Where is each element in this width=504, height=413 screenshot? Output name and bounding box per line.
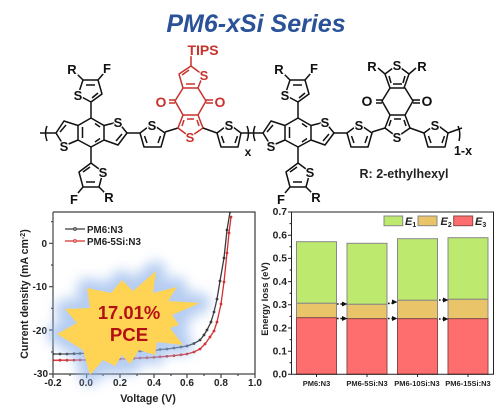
legend: 2 xyxy=(448,222,452,229)
curve: PM6-5Si:N3 xyxy=(53,217,231,360)
BDD acceptor unit: R xyxy=(417,59,427,74)
benzodithiophene unit 1: F xyxy=(70,192,78,207)
red TIPS-substituted unit: O xyxy=(156,94,167,110)
PCE starburst callout: PCE xyxy=(110,324,148,345)
legend xyxy=(384,216,486,229)
y tick labels: 0.3 xyxy=(273,300,287,311)
BDD acceptor unit: O xyxy=(362,93,373,109)
BDD acceptor unit: S xyxy=(393,58,402,73)
x tick labels: 0.6 xyxy=(180,378,194,389)
axes ticks xyxy=(49,212,255,378)
y tick labels: -20 xyxy=(33,326,47,337)
thiophene bridge 1 xyxy=(127,118,178,147)
y axis title: ) xyxy=(19,229,31,233)
benzodithiophene unit 2: F xyxy=(310,61,318,76)
thiophene bridge 4 and right bracket xyxy=(410,118,472,158)
legend: PM6:N3 xyxy=(87,225,123,236)
thiophene bridge 1: S xyxy=(148,118,157,133)
x tick labels xyxy=(44,378,262,389)
PCE starburst callout: 17.01% xyxy=(98,302,160,323)
R definition label: R: 2-ethylhexyl xyxy=(360,167,448,181)
y tick labels: -10 xyxy=(33,282,47,293)
benzodithiophene unit 1: R xyxy=(104,190,114,205)
benzodithiophene unit 1: R xyxy=(67,62,77,77)
y tick labels xyxy=(273,207,287,381)
benzodithiophene unit 2: S xyxy=(267,139,276,154)
thiophene bridge 2 xyxy=(203,118,263,147)
x tick labels: 1.0 xyxy=(248,378,262,389)
bars: PM6-15Si:N3 xyxy=(448,238,488,374)
title: PM6-xSi Series xyxy=(166,10,346,38)
BDD acceptor unit: R xyxy=(367,59,377,74)
legend: 3 xyxy=(482,222,486,229)
BDD acceptor unit: O xyxy=(422,93,433,109)
bars: PM6-10Si:N3 xyxy=(398,239,438,374)
benzodithiophene unit 2: R xyxy=(311,190,321,205)
benzodithiophene unit 2 xyxy=(263,61,334,207)
benzodithiophene unit 1: F xyxy=(103,61,111,76)
y axis title: Current density (mA cm xyxy=(19,239,31,359)
benzodithiophene unit 1: S xyxy=(60,139,69,154)
y tick labels: 0.6 xyxy=(273,230,287,242)
bars: PM6-5Si:N3 xyxy=(347,243,387,374)
y tick labels: 0.0 xyxy=(273,370,287,381)
thiophene bridge 4 and right bracket: 1-x xyxy=(454,144,472,158)
legend xyxy=(65,225,141,248)
legend: E xyxy=(440,216,448,228)
x tick labels: 0.8 xyxy=(214,378,228,389)
y axis title: Energy loss (eV) xyxy=(259,262,270,336)
benzodithiophene unit 2: S xyxy=(306,165,315,180)
legend: E xyxy=(475,216,482,228)
bars: PM6:N3 xyxy=(296,242,336,374)
BDD acceptor unit: S xyxy=(393,130,402,145)
x tick labels: 0.2 xyxy=(113,378,127,389)
benzodithiophene unit 1: S xyxy=(99,165,108,180)
x axis title: Voltage (V) xyxy=(120,393,176,405)
legend: PM6-5Si:N3 xyxy=(87,237,141,248)
y tick labels: 0.5 xyxy=(273,254,287,265)
thiophene bridge 4 and right bracket: S xyxy=(431,118,440,133)
x tick labels: PM6-15Si:N3 xyxy=(445,379,491,388)
J-V chart xyxy=(19,212,262,405)
axes frame xyxy=(53,212,255,374)
x tick labels xyxy=(303,379,491,388)
benzodithiophene unit 2: S xyxy=(281,88,290,103)
axes frame and ticks xyxy=(288,212,494,377)
x tick labels: PM6:N3 xyxy=(303,379,330,388)
y tick labels: 0.7 xyxy=(273,207,287,218)
PCE starburst callout xyxy=(57,271,200,375)
x tick labels: -0.2 xyxy=(44,378,62,389)
red TIPS-substituted unit: O xyxy=(215,94,226,110)
x tick labels: 0.0 xyxy=(79,378,93,389)
red TIPS-substituted unit: S xyxy=(186,130,195,145)
benzodithiophene unit 2: F xyxy=(277,192,285,207)
left polymer bracket and x subscript: x xyxy=(245,145,252,159)
x tick labels: PM6-5Si:N3 xyxy=(346,379,388,388)
benzodithiophene unit 1: S xyxy=(74,88,83,103)
red TIPS-substituted unit xyxy=(156,42,226,145)
legend: E xyxy=(405,216,412,228)
benzodithiophene unit 1: S xyxy=(114,115,123,130)
left polymer bracket and x subscript xyxy=(40,126,252,159)
dotted arrows between bars xyxy=(337,298,448,322)
thiophene bridge 2: S xyxy=(225,118,234,133)
legend: 1 xyxy=(412,222,416,229)
y tick labels: 0.1 xyxy=(273,346,287,358)
chemical structure: PM6-xSi polymer xyxy=(40,42,472,207)
y axis title: -2 xyxy=(20,233,27,239)
energy loss bar chart xyxy=(259,207,494,388)
x tick labels: 0.4 xyxy=(147,378,161,389)
benzodithiophene unit 1 xyxy=(56,61,127,207)
curve: PM6:N3 xyxy=(53,212,230,354)
red TIPS-substituted unit: S xyxy=(200,68,209,83)
y tick labels: 0.2 xyxy=(273,323,287,334)
y tick labels: 0 xyxy=(41,239,47,250)
x tick labels: PM6-10Si:N3 xyxy=(394,379,440,388)
y tick labels xyxy=(33,239,48,380)
red TIPS-substituted unit: TIPS xyxy=(187,42,219,58)
benzodithiophene unit 2: S xyxy=(321,115,330,130)
benzodithiophene unit 2: R xyxy=(274,62,284,77)
thiophene bridge 3: S xyxy=(355,118,364,133)
y tick labels: -30 xyxy=(34,369,48,380)
BDD acceptor unit xyxy=(362,58,433,145)
y tick labels: 0.4 xyxy=(273,277,287,288)
thiophene bridge 3 xyxy=(334,118,385,147)
